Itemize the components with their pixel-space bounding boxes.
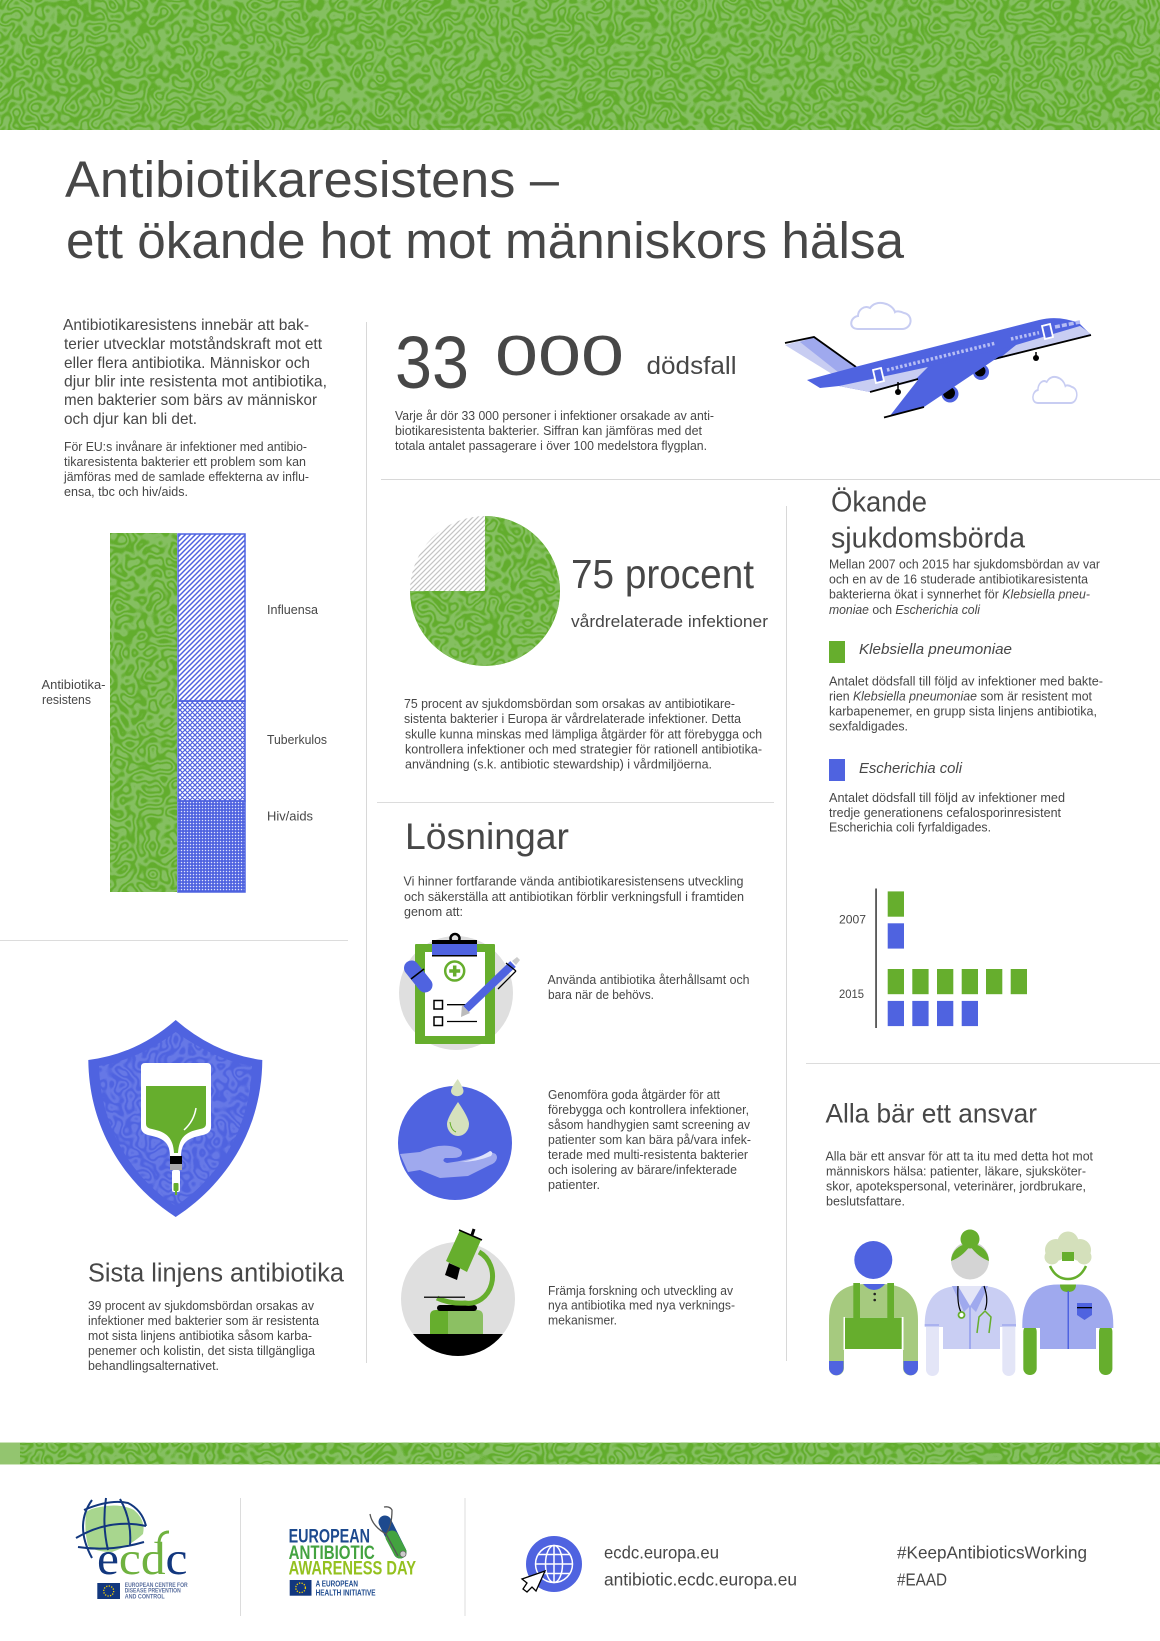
stat heading: 75 procent	[571, 551, 755, 597]
body text: kontrollera infektioner och med strategier för rationell antibiotika-	[405, 742, 762, 756]
title	[65, 151, 905, 269]
klebsiella text: rien Klebsiella pneumoniae som är resistent mot	[829, 690, 1093, 704]
panel: increasing burden	[829, 486, 1103, 834]
body text	[395, 409, 714, 453]
agency name: EUROPEAN CENTRE FOR	[125, 1583, 188, 1589]
solution text 2	[548, 1088, 751, 1192]
intro text: och en av de 16 studerade antibiotikaresistenta	[829, 573, 1088, 587]
body text: 75 procent av sjukdomsbördan som orsakas av antibiotikare-	[404, 697, 735, 711]
cloud	[1033, 377, 1077, 403]
intro lead text: djur blir inte resistenta mot antibiotika,	[64, 374, 327, 390]
solution text 2: patienter som kan bära på/vara infek-	[548, 1133, 751, 1147]
intro text: och säkerställa att antibiotikan förblir verkningsfull i framtiden	[404, 890, 744, 904]
footer hashtags: #KeepAntibioticsWorking	[897, 1542, 1087, 1562]
fuselage	[807, 318, 1091, 392]
heading	[831, 486, 1026, 554]
body text: Varje år dör 33 000 personer i infektioner orsakade av anti-	[395, 409, 714, 423]
tail fin	[785, 337, 856, 374]
logo: ECDC	[76, 1498, 188, 1600]
footer links	[604, 1542, 797, 1590]
body text: mot sista linjens antibiotika såsom karba-	[88, 1329, 312, 1343]
body text: beslutsfattare.	[826, 1194, 905, 1208]
cloud	[851, 303, 911, 329]
body text: infektioner med bakterier som är resistenta	[88, 1314, 319, 1328]
e. coli text: Escherichia coli fyrfaldigades.	[829, 820, 991, 834]
heading: Ökande	[831, 486, 927, 518]
wordmark: AWARENESS DAY	[289, 1558, 416, 1579]
legend: e. coli	[829, 759, 963, 781]
axis	[875, 888, 877, 1028]
body text: behandlingsalternativet.	[88, 1359, 219, 1373]
solution text 1	[548, 973, 750, 1002]
pill and stethoscope	[370, 1507, 406, 1557]
EU flag	[97, 1583, 120, 1599]
header pattern banner	[0, 0, 1160, 130]
intro lead text: eller flera antibiotika. Människor och	[64, 355, 310, 372]
bar labels: Hiv/aids	[267, 810, 313, 824]
klebsiella text	[829, 675, 1103, 734]
chart: pie 75 percent	[410, 516, 560, 666]
icon: airplane with clouds	[785, 303, 1091, 418]
body text	[404, 697, 762, 772]
body text: användning (s.k. antibiotic stewardship) i vårdmiljöerna.	[405, 758, 712, 772]
EU flag	[290, 1580, 312, 1596]
intro lead text: men bakterier som bärs av människor	[64, 392, 317, 409]
bars 2015 e. coli	[888, 1001, 978, 1026]
intro lead text	[63, 317, 327, 428]
klebsiella text: sexfaldigades.	[829, 720, 908, 734]
year labels	[839, 913, 866, 1001]
panel: 33 000 deaths	[395, 321, 736, 453]
body text	[826, 1150, 1094, 1208]
agency name	[125, 1583, 188, 1600]
panel: last-line antibiotics	[88, 1260, 345, 1373]
body text	[88, 1299, 319, 1373]
intro lead text: Antibiotikaresistens innebär att bak-	[63, 317, 309, 334]
footer links: ecdc.europa.eu	[604, 1542, 719, 1562]
body text: totala antalet passagerare i över 100 medelstora flygplan.	[395, 439, 707, 453]
bar: hiv	[178, 801, 245, 892]
body text: skulle kunna minskas med lämpliga åtgärder för att förebygga och	[405, 728, 762, 742]
solution text 2: patienter.	[548, 1178, 600, 1192]
footer hashtags	[897, 1542, 1087, 1590]
intro text: Mellan 2007 och 2015 har sjukdomsbördan av var	[829, 558, 1100, 572]
klebsiella text: Antalet dödsfall till följd av infektioner med bakte-	[829, 675, 1103, 689]
heading: Lösningar	[405, 816, 569, 857]
footer pattern band	[0, 1443, 1160, 1464]
globe	[76, 1498, 146, 1558]
body text: penemer och kolistin, det sista tillgängliga	[88, 1344, 315, 1358]
solution text 2: och isolering av bärare/infekterade	[548, 1163, 737, 1177]
icon: farmer	[829, 1241, 918, 1376]
logo: European Antibiotic Awareness Day	[289, 1507, 416, 1597]
panel: introduction	[63, 317, 327, 499]
wing and engines	[884, 345, 1039, 418]
solution text 3: nya antibiotika med nya verknings-	[548, 1299, 735, 1313]
year labels: 2007	[839, 913, 866, 927]
stat label: vårdrelaterade infektioner	[571, 612, 768, 631]
e. coli text	[829, 791, 1065, 834]
legend: klebsiella	[829, 641, 1012, 663]
body text: människors hälsa: patienter, läkare, sjuksköter-	[826, 1164, 1086, 1178]
solution text 2: såsom handhygien samt screening av	[548, 1118, 751, 1132]
footer hashtags: #EAAD	[897, 1570, 947, 1590]
pie slice: other	[410, 516, 485, 591]
heading: sjukdomsbörda	[831, 522, 1026, 554]
solution text 2: Genomföra goda åtgärder för att	[548, 1088, 720, 1102]
initiative text: A EUROPEAN	[316, 1580, 358, 1589]
bar labels: Tuberkulos	[267, 733, 327, 747]
bar labels: Antibiotika-	[42, 678, 106, 692]
heading: Alla bär ett ansvar	[826, 1098, 1037, 1128]
body text: 39 procent av sjukdomsbördan orsakas av	[88, 1299, 315, 1313]
intro text: moniae och Escherichia coli	[829, 603, 981, 617]
wordmark: ecdc	[97, 1533, 188, 1585]
bar labels	[42, 603, 327, 824]
wordmark: ANTIBIOTIC	[289, 1543, 375, 1564]
bars 2007	[888, 891, 904, 949]
chart: deaths 2007 vs 2015	[839, 888, 1027, 1028]
bar: influenza	[178, 534, 245, 701]
bar: tuberculosis	[178, 701, 245, 801]
wordmark leaf	[159, 1532, 169, 1553]
icon: microscope	[401, 1228, 515, 1356]
initiative text: HEALTH INITIATIVE	[316, 1588, 376, 1597]
initiative text	[316, 1580, 376, 1597]
intro text: Vi hinner fortfarande vända antibiotikaresistensens utveckling	[404, 874, 744, 888]
footer links: antibiotic.ecdc.europa.eu	[604, 1570, 797, 1590]
intro small text: För EU:s invånare är infektioner med antibio-	[64, 440, 307, 454]
legend: e. coli: Escherichia coli	[859, 761, 963, 777]
bars 2015 klebsiella	[888, 969, 1027, 994]
chart: burden comparison stacked bars	[42, 533, 327, 892]
solution text 2: terade med multi-resistenta bakterier	[548, 1148, 748, 1162]
solution text 3: mekanismer.	[548, 1314, 617, 1328]
body text: skor, apotekspersonal, veterinärer, jordbrukare,	[826, 1179, 1086, 1193]
klebsiella text: karbapenemer, en grupp sista linjens antibiotika,	[829, 705, 1097, 719]
panel: solutions	[398, 816, 751, 1364]
intro small text: jämföras med de samlade effekterna av influ-	[63, 470, 309, 484]
solution text 1: bara när de behövs.	[548, 988, 654, 1002]
bar: antibiotic resistance	[110, 533, 177, 892]
year labels: 2015	[839, 987, 864, 1001]
icon: web globe with cursor	[522, 1536, 582, 1592]
solution text 3	[548, 1284, 735, 1328]
intro lead text: och djur kan bli det.	[64, 411, 197, 428]
big number: 33	[395, 321, 469, 404]
solution text 2: förebygga och kontrollera infektioner,	[548, 1103, 749, 1117]
solution text 3: Främja forskning och utveckling av	[548, 1284, 734, 1298]
agency name: AND CONTROL	[125, 1594, 165, 1600]
panel: 75 percent	[404, 551, 768, 772]
panel: everyone responsible	[826, 1098, 1113, 1376]
agency name: DISEASE PREVENTION	[125, 1589, 181, 1595]
pie slice: healthcare associated	[410, 516, 560, 666]
icon: surgeon	[1022, 1232, 1113, 1375]
intro lead text: terier utvecklar motståndskraft mot ett	[64, 335, 323, 353]
e. coli text: Antalet dödsfall till följd av infektioner med	[829, 791, 1065, 805]
unit label: dödsfall	[646, 352, 736, 380]
wordmark	[289, 1527, 416, 1579]
bar labels: Influensa	[267, 603, 318, 617]
body text: sistenta bakterier i Europa är vårdrelaterade infektioner. Detta	[404, 712, 741, 726]
legend: klebsiella: Klebsiella pneumoniae	[859, 642, 1012, 658]
intro text	[829, 558, 1100, 617]
title: ett ökande hot mot människors hälsa	[66, 212, 905, 269]
icon: shield with IV bag	[88, 1020, 263, 1217]
heading: Sista linjens antibiotika	[88, 1260, 345, 1288]
bar labels: resistens	[42, 693, 91, 707]
intro text	[404, 874, 744, 919]
icon: doctor	[925, 1230, 1016, 1376]
intro text: genom att:	[404, 905, 463, 919]
e. coli text: tredje generationens cefalosporinresistent	[829, 806, 1062, 820]
big number	[395, 321, 624, 404]
body text: biotikaresistenta bakterier. Siffran kan jämföras med det	[395, 424, 703, 438]
big number: 000	[495, 324, 624, 388]
icon: clipboard	[399, 934, 520, 1050]
title: Antibiotikaresistens –	[65, 151, 560, 208]
intro small text	[63, 440, 309, 499]
solution text 1: Använda antibiotika återhållsamt och	[548, 973, 750, 987]
intro text: bakterierna ökat i synnerhet för Klebsiella pneu-	[829, 588, 1090, 602]
icon: hand and drop	[398, 1079, 512, 1200]
intro small text: tikaresistenta bakterier ett problem som kan	[64, 455, 306, 469]
intro small text: ensa, tbc och hiv/aids.	[64, 485, 188, 499]
wordmark: EUROPEAN	[289, 1527, 370, 1548]
body text: Alla bär ett ansvar för att ta itu med detta hot mot	[826, 1150, 1094, 1164]
